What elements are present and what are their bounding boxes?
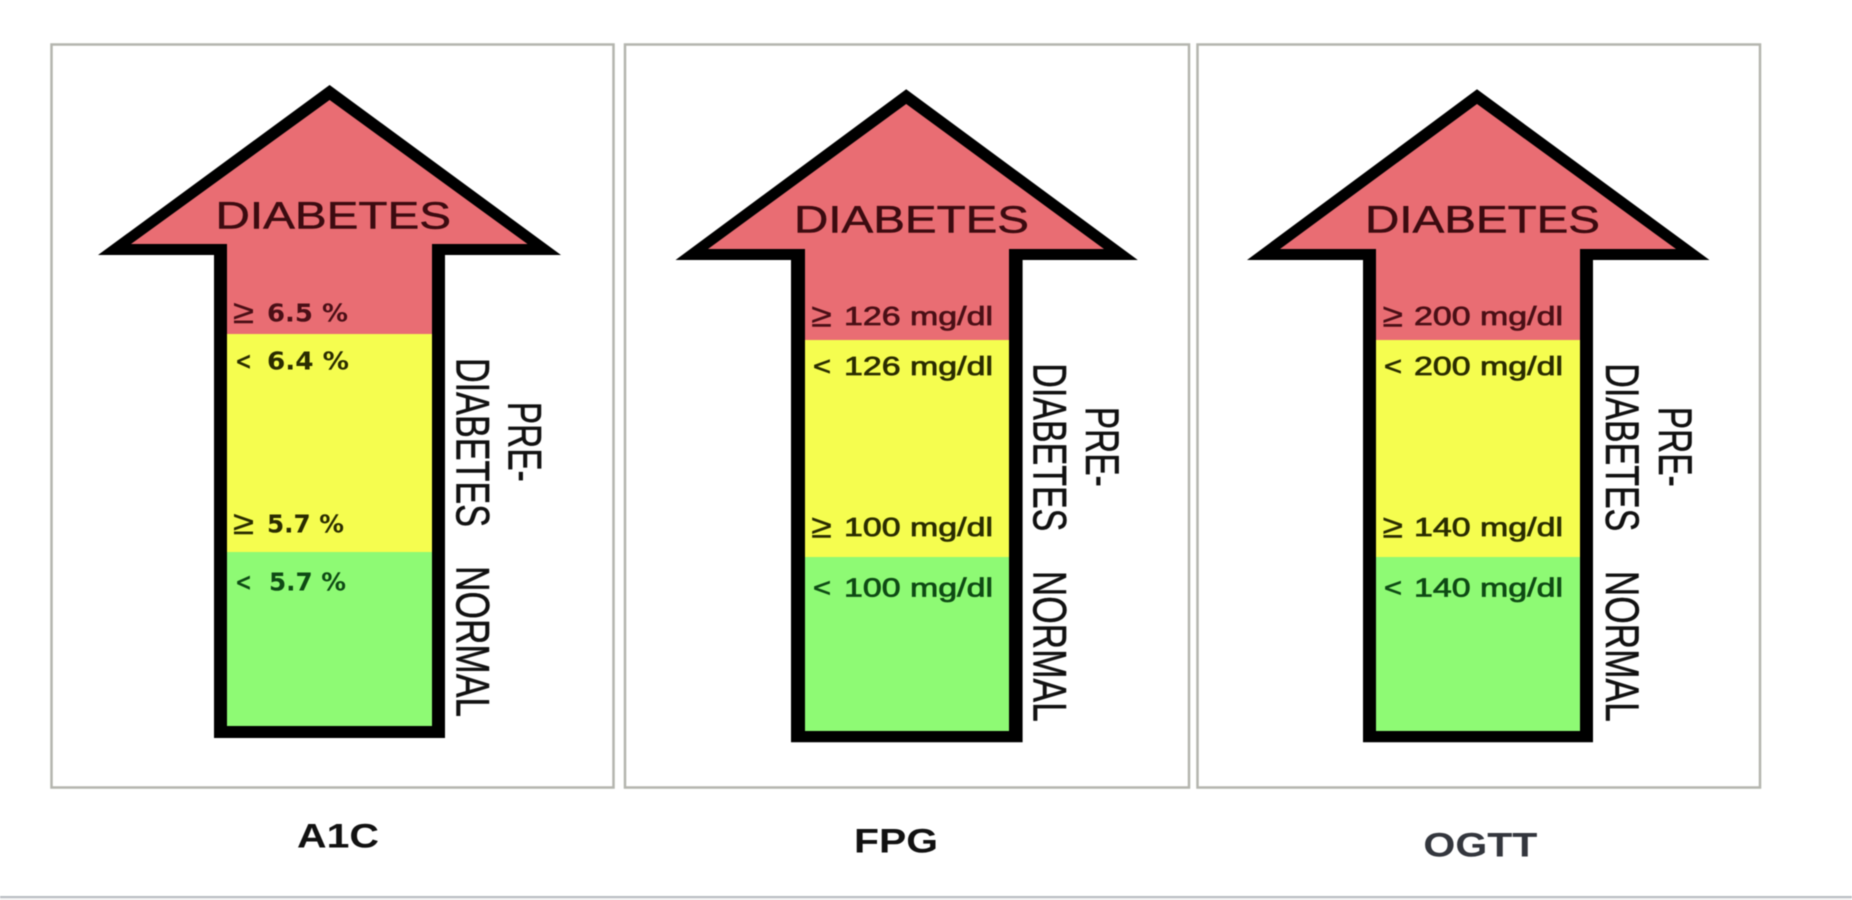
panel: A1C bbox=[52, 44, 614, 788]
threshold: at least 140 mg/dl bbox=[1382, 508, 1563, 544]
caption: A1C: A1C bbox=[297, 817, 379, 855]
label: DIABETES: DIABETES bbox=[1365, 199, 1600, 241]
label: DIABETES: DIABETES bbox=[216, 195, 451, 237]
threshold: at least 126 mg/dl: 126 mg/dl bbox=[844, 301, 993, 331]
threshold: below 126 mg/dl: < bbox=[813, 351, 831, 381]
threshold: below 5.7 percent: < bbox=[235, 568, 252, 597]
side label: PRE-DIABETES: DIABETES bbox=[446, 358, 499, 527]
threshold: below 140 mg/dl: 140 mg/dl bbox=[1414, 573, 1563, 603]
side label: PRE-DIABETES: PRE- bbox=[498, 402, 551, 482]
threshold: below 126 mg/dl: 126 mg/dl bbox=[844, 351, 993, 381]
threshold: at least 100 mg/dl bbox=[811, 508, 993, 544]
side label: NORMAL: NORMAL bbox=[446, 566, 499, 717]
threshold: below 6.4 percent: 6.4 % bbox=[267, 346, 349, 375]
threshold: at least 126 mg/dl: ≥ bbox=[811, 296, 832, 334]
threshold: at least 140 mg/dl: 140 mg/dl bbox=[1414, 512, 1563, 542]
threshold: at least 5.7 percent bbox=[233, 504, 344, 541]
threshold: at least 6.5 percent bbox=[233, 293, 348, 330]
threshold: below 200 mg/dl bbox=[1384, 351, 1563, 381]
threshold: at least 200 mg/dl bbox=[1382, 296, 1563, 334]
threshold: below 140 mg/dl: < bbox=[1384, 573, 1402, 603]
threshold: below 140 mg/dl bbox=[1384, 573, 1563, 603]
threshold: below 200 mg/dl: < bbox=[1384, 351, 1402, 381]
side label: PRE-DIABETES: DIABETES bbox=[1596, 363, 1648, 531]
threshold: at least 100 mg/dl: ≥ bbox=[811, 508, 832, 544]
threshold: below 100 mg/dl: 100 mg/dl bbox=[844, 573, 993, 603]
threshold: at least 5.7 percent: 5.7 % bbox=[267, 510, 344, 539]
threshold: at least 5.7 percent: ≥ bbox=[233, 504, 254, 541]
threshold: at least 126 mg/dl bbox=[811, 296, 993, 334]
threshold: at least 6.5 percent: ≥ bbox=[233, 293, 254, 330]
threshold: below 100 mg/dl bbox=[813, 573, 993, 603]
arrow: OGTT scale bbox=[1247, 89, 1710, 742]
side label: PRE-DIABETES bbox=[446, 358, 551, 527]
caption: FPG: FPG bbox=[854, 822, 938, 860]
side label: NORMAL: NORMAL bbox=[1596, 571, 1648, 722]
threshold: at least 200 mg/dl: ≥ bbox=[1382, 296, 1403, 334]
caption: OGTT: OGTT bbox=[1423, 827, 1538, 865]
threshold: at least 6.5 percent: 6.5 % bbox=[267, 299, 348, 328]
threshold: at least 100 mg/dl: 100 mg/dl bbox=[844, 512, 993, 542]
panel: OGTT bbox=[1198, 44, 1760, 788]
threshold: below 100 mg/dl: < bbox=[813, 573, 831, 603]
arrow: A1C scale bbox=[98, 85, 561, 738]
panel frame: OGTT bbox=[1198, 44, 1760, 788]
threshold: below 126 mg/dl bbox=[813, 351, 993, 381]
threshold: at least 200 mg/dl: 200 mg/dl bbox=[1414, 301, 1563, 331]
side label: PRE-DIABETES: PRE- bbox=[1076, 407, 1128, 487]
label: DIABETES: DIABETES bbox=[794, 199, 1029, 241]
panel frame: A1C bbox=[52, 44, 614, 788]
panel frame: FPG bbox=[625, 44, 1189, 788]
threshold: below 6.4 percent: < bbox=[235, 346, 252, 375]
threshold: below 5.7 percent bbox=[235, 568, 346, 597]
side label: NORMAL: NORMAL bbox=[1023, 571, 1076, 722]
side label: PRE-DIABETES bbox=[1596, 363, 1701, 531]
side label: PRE-DIABETES: DIABETES bbox=[1023, 363, 1076, 531]
side label: PRE-DIABETES: PRE- bbox=[1648, 407, 1701, 487]
threshold: below 5.7 percent: 5.7 % bbox=[269, 568, 346, 597]
panel: FPG bbox=[625, 44, 1189, 788]
side label: PRE-DIABETES bbox=[1023, 363, 1128, 531]
threshold: at least 140 mg/dl: ≥ bbox=[1382, 508, 1403, 544]
arrow: FPG scale bbox=[676, 89, 1138, 742]
threshold: below 200 mg/dl: 200 mg/dl bbox=[1414, 351, 1563, 381]
threshold: below 6.4 percent bbox=[235, 346, 349, 375]
